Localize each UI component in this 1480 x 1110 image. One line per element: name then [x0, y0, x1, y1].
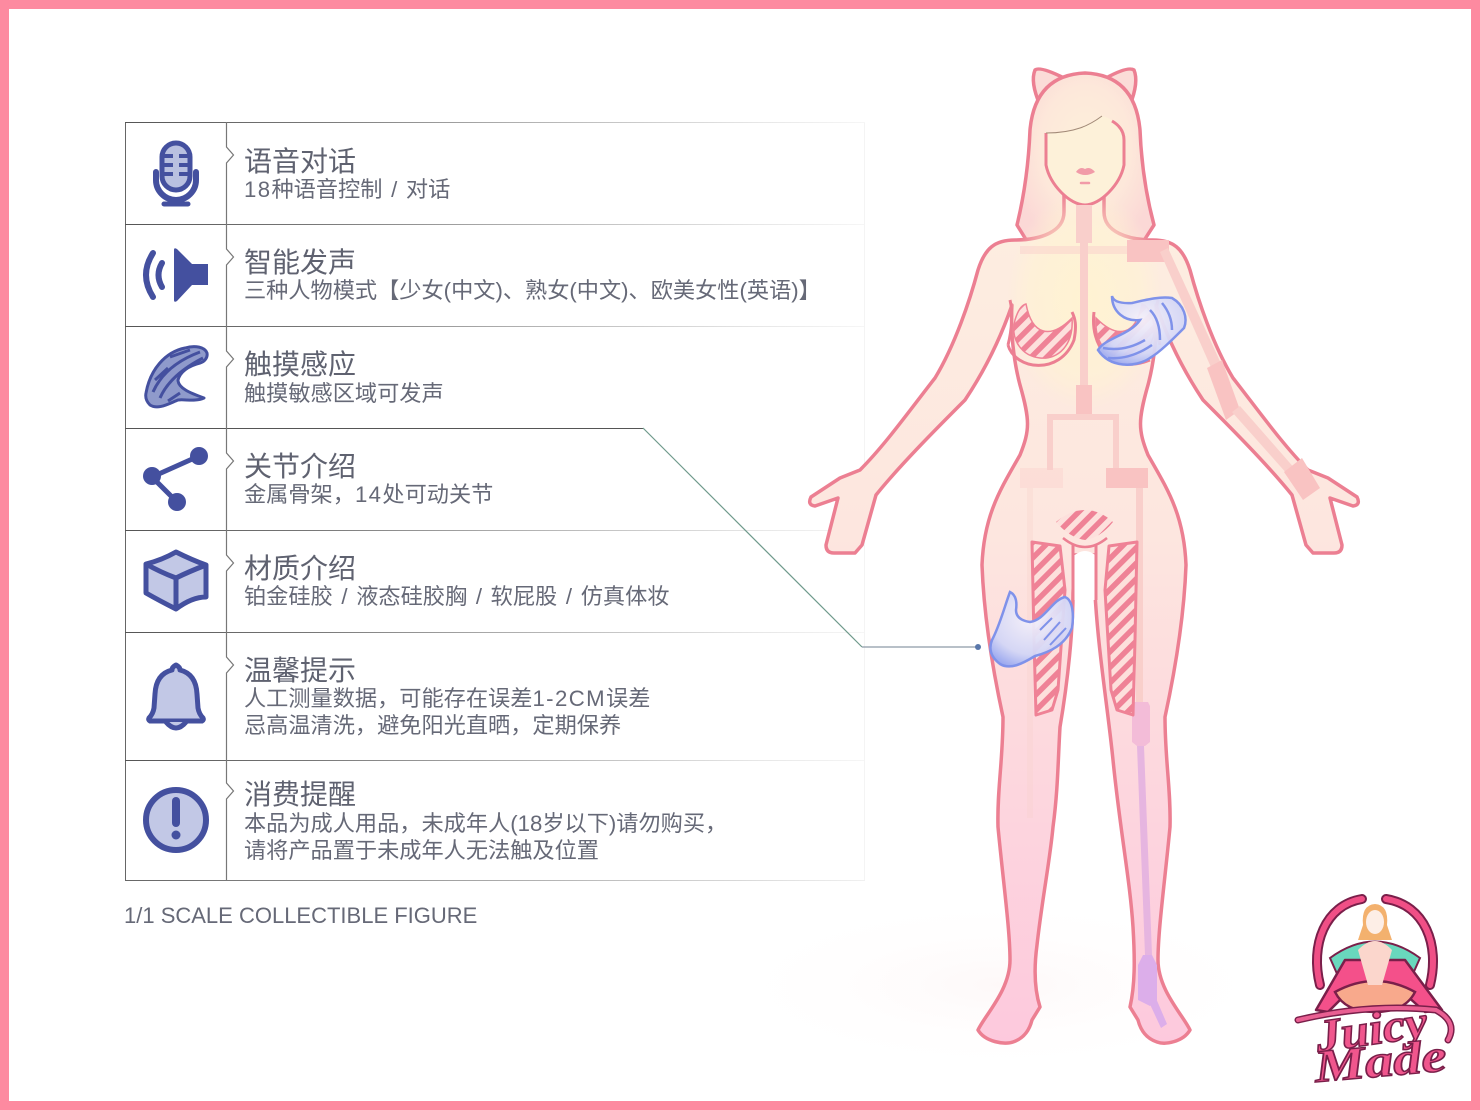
heading: joints: 关节介绍: [244, 451, 356, 482]
touch zone: right thigh: [1105, 542, 1137, 715]
touch hand: chest: [1098, 296, 1186, 365]
figure: face: [1046, 116, 1124, 205]
spec table: [125, 123, 126, 880]
logo: Juicy Made emblem: Made: [1311, 1030, 1448, 1092]
text: consumer notice detail: [244, 811, 727, 863]
row: touch sensing: [125, 326, 864, 408]
row: material: [125, 530, 828, 612]
heading: material: 材质介绍: [244, 553, 356, 584]
row: consumer notice: [125, 760, 864, 863]
icon: hand: [144, 345, 209, 408]
callout leader line: [643, 428, 981, 650]
text: material detail: 铂金硅胶 / 液态硅胶胸 / 软屁股 / 仿真体妆: [244, 584, 669, 609]
touch zone: left thigh: [1032, 542, 1065, 715]
heading: consumer notice: 消费提醒: [244, 779, 356, 810]
text: care tips detail: [244, 686, 650, 738]
heading: touch sensing: 触摸感应: [244, 349, 356, 380]
icon: cube: [144, 550, 208, 612]
icon: connected joints: [143, 447, 208, 511]
figure: ears and hair: [1017, 69, 1154, 262]
text: joints detail: 金属骨架，14处可动关节: [244, 482, 493, 507]
touch zone: right chest: [1093, 300, 1160, 364]
icon: bell: [146, 662, 206, 730]
text: care tips detail: 忌高温清洗，避免阳光直晒，定期保养: [244, 713, 621, 738]
icon: microphone: [153, 140, 199, 206]
logo: Juicy Made emblem: [1298, 899, 1451, 1092]
leg gap: [1072, 551, 1097, 600]
heading: care tips: 温馨提示: [244, 655, 356, 686]
text: smart sound detail: 三种人物模式【少女(中文)、熟女(中文)、欧美女性(英语)】: [244, 278, 821, 303]
figure: body outline: [810, 195, 1358, 1043]
text: care tips detail: 人工测量数据，可能存在误差1-2CM误差: [244, 686, 650, 711]
row: care tips: [125, 632, 864, 738]
logo: Juicy Made emblem: Juicy: [1311, 996, 1431, 1062]
icon: speaker: [142, 248, 208, 302]
text: consumer notice detail: 请将产品置于未成年人无法触及位置: [244, 838, 599, 863]
text: touch sensing detail: 触摸敏感区域可发声: [244, 381, 444, 406]
figure: internal skeleton: [1020, 205, 1320, 1028]
row: joints: [125, 428, 643, 511]
caption: 1/1 SCALE COLLECTIBLE FIGURE: [124, 903, 477, 928]
touch zone: left chest: [1008, 300, 1075, 365]
row: voice dialogue: [125, 122, 865, 206]
table left edge: [125, 122, 126, 881]
row: smart sound: [125, 224, 864, 303]
text: voice dialogue detail: 18种语音控制 / 对话: [244, 177, 450, 202]
touch zone: pelvis: [1056, 510, 1113, 547]
figure: chest glow: [1007, 190, 1163, 410]
icon: exclamation: [143, 787, 209, 853]
heading: voice dialogue: 语音对话: [244, 146, 356, 177]
text: consumer notice detail: 本品为成人用品，未成年人(18岁以下)请勿购买，: [244, 811, 727, 836]
heading: smart sound: 智能发声: [244, 247, 356, 278]
touch hand: thigh: [990, 592, 1073, 666]
